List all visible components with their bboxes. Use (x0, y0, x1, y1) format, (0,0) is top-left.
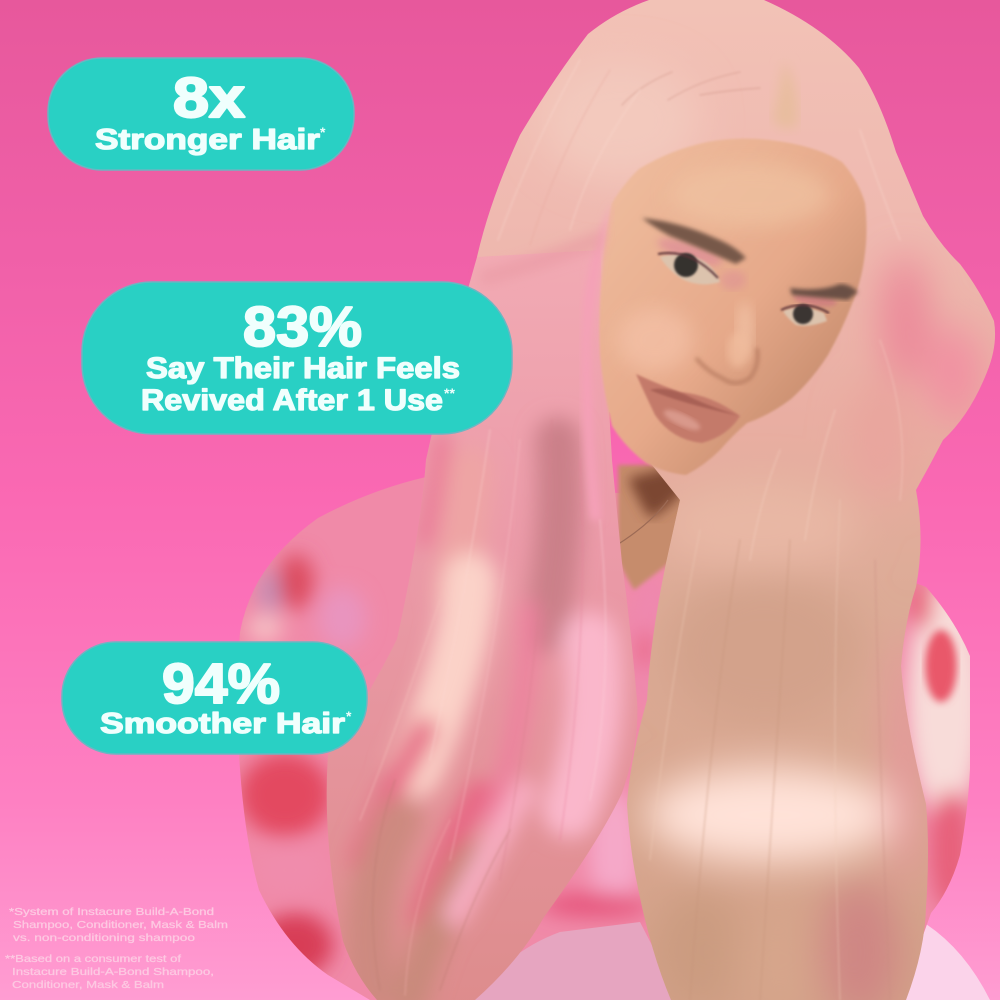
dark pink band left (480, 228, 605, 285)
footnotes: *System of Instacure Build-A-Bond (9, 906, 214, 918)
footnotes: Shampoo, Conditioner, Mask & Balm (13, 919, 228, 931)
stat value: 94% (162, 652, 280, 716)
hair strands (360, 60, 902, 1000)
nose (696, 348, 758, 383)
corset panel (470, 922, 680, 1000)
footnotes: **Based on a consumer test of (5, 953, 181, 965)
eyebrows (642, 218, 746, 264)
neck (618, 465, 700, 590)
pink framing strand (582, 203, 612, 520)
stat label: Stronger Hair (95, 124, 320, 156)
head and right hair (470, 0, 1000, 1000)
stat value: 8x (173, 66, 245, 130)
face (599, 138, 866, 475)
footnotes (5, 906, 228, 991)
stat value: 83% (243, 295, 362, 359)
eyes (660, 254, 720, 284)
stat pill: 83% revived (82, 282, 512, 434)
model illustration (230, 0, 1000, 1000)
footnote mark: * (346, 708, 352, 724)
stat pill: 94% smoother (62, 642, 367, 754)
skirt (880, 924, 990, 1000)
stat pill: 8x stronger hair (48, 58, 354, 170)
footnote mark: ** (444, 385, 455, 401)
footnote mark: * (320, 124, 326, 140)
centre part (772, 60, 798, 129)
stat label: Smoother Hair (100, 708, 345, 740)
footnotes: Conditioner, Mask & Balm (12, 979, 164, 991)
footnotes: vs. non-conditioning shampoo (13, 932, 195, 944)
lips (636, 374, 740, 443)
left hair lock (320, 240, 650, 1000)
stat label: Say Their Hair Feels (146, 352, 460, 385)
patterned shirt (230, 470, 983, 1000)
stat pill: 83% revived: Revived After 1 Use (141, 384, 443, 417)
footnotes: Instacure Build-A-Bond Shampoo, (12, 966, 214, 978)
